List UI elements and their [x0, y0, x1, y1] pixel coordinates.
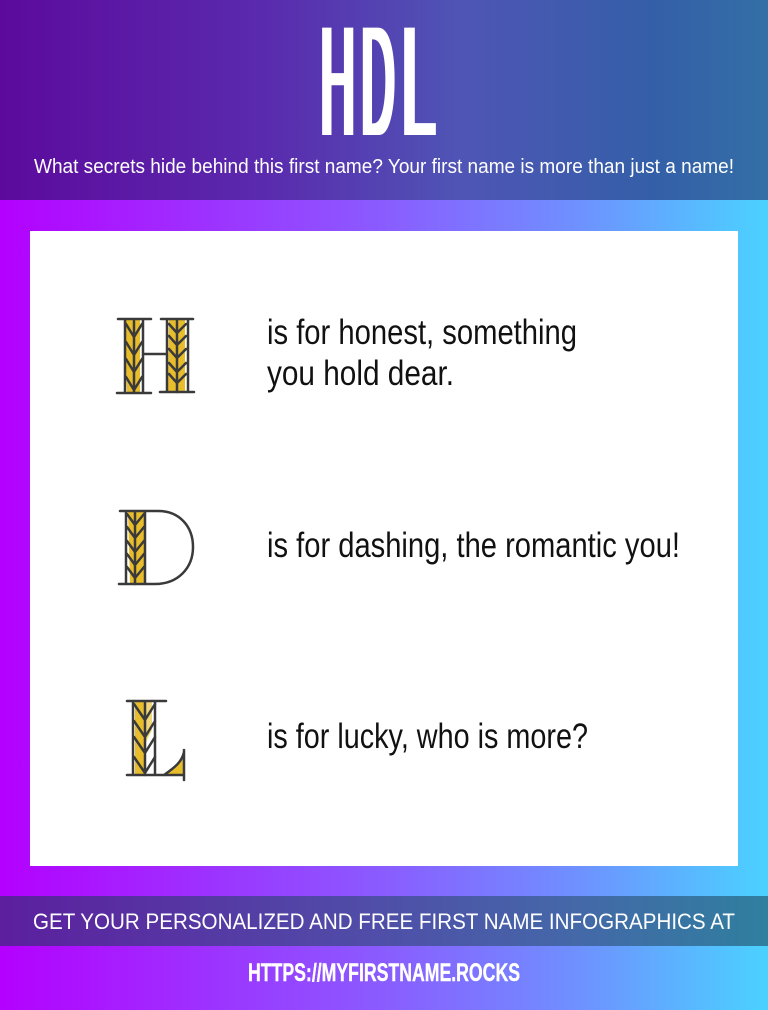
header band	[0, 0, 768, 200]
text: H line: you hold dear.	[267, 354, 454, 393]
white content panel	[30, 231, 738, 866]
banner text: GET YOUR PERSONALIZED AND FREE FIRST NAME INFOGRAPHICS AT	[33, 909, 735, 934]
title: H	[321, 0, 355, 169]
text: H line	[267, 313, 577, 393]
title: L	[402, 0, 435, 169]
footer banner	[0, 896, 768, 946]
icon: letter D with wheat	[119, 511, 193, 584]
text: D line: is for dashing, the romantic you!	[267, 526, 680, 565]
title	[321, 0, 435, 169]
title: D	[362, 0, 394, 169]
icon: letter L with wheat	[127, 701, 184, 780]
subtitle: What secrets hide behind this first name? Your first name is more than just a name!	[34, 156, 734, 178]
icon: letter H with wheat	[117, 319, 194, 393]
text: L line: is for lucky, who is more?	[267, 717, 588, 756]
text: H line: is for honest, something	[267, 313, 577, 352]
website url: HTTPS://MYFIRSTNAME.ROCKS	[248, 959, 520, 987]
